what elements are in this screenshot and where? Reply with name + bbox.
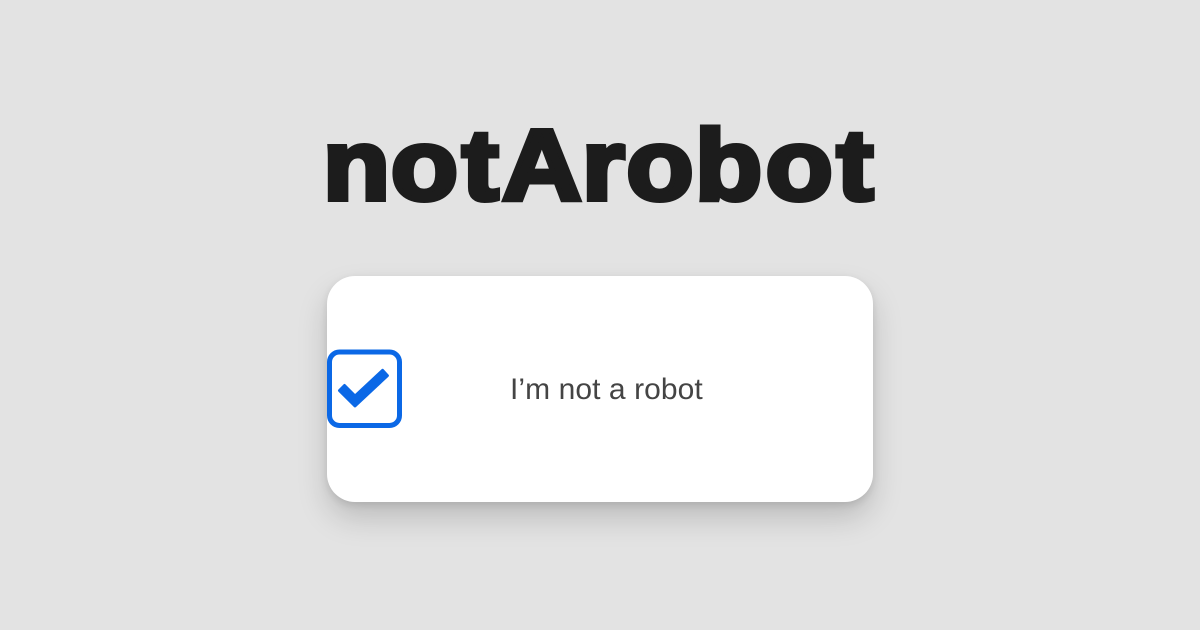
panel: captcha card (327, 276, 873, 502)
text: I'm not a robot: I’m not a robot (510, 372, 703, 406)
title: notArobot: notArobot (323, 110, 873, 221)
icon: blue checked checkbox (327, 350, 402, 428)
